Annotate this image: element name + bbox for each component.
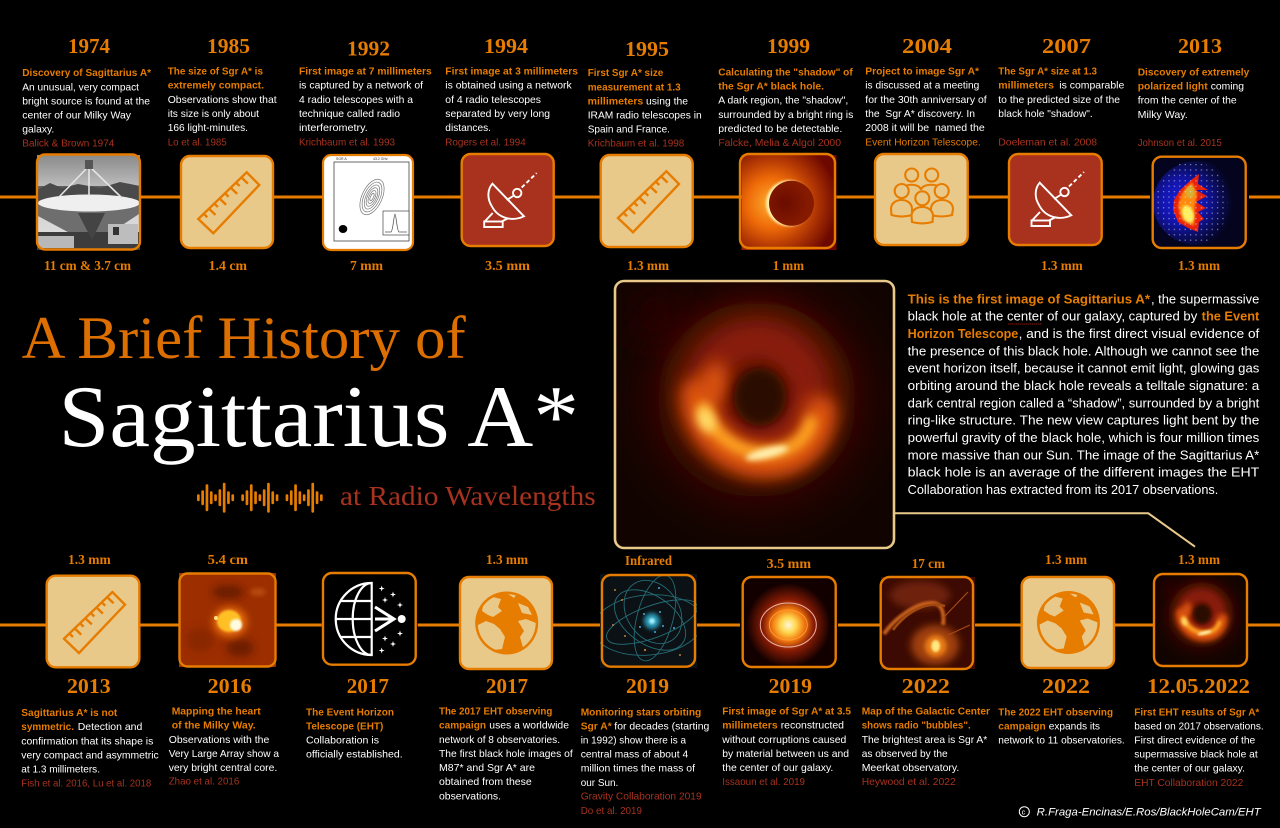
description: Milky Way. [1138, 109, 1188, 121]
year: 2019 [769, 674, 812, 698]
event 1974 [22, 34, 152, 273]
description: EHT Collaboration 2022 [1134, 777, 1243, 789]
description: the Sgr A* discovery. In [865, 108, 975, 120]
event 2022 Meerkat [862, 556, 990, 788]
description: is comparable [1059, 80, 1124, 92]
event 2004 [865, 34, 987, 245]
title: Sagittarius A* [58, 369, 579, 466]
description: Sagittarius A* is not [21, 707, 118, 719]
event 2007 [998, 34, 1124, 273]
image: Very Large Array core [179, 573, 276, 667]
year: 1995 [625, 37, 669, 61]
description: extremely compact. [168, 80, 264, 92]
description: First image at 7 millimeters [299, 66, 432, 78]
description: campaign [439, 720, 486, 732]
wavelength: 1.3 mm [1178, 258, 1221, 273]
description: based on 2017 observations. [1134, 720, 1264, 732]
event 1985 [168, 34, 277, 273]
description: center of our Milky Way [22, 110, 132, 122]
wavelength: 1.3 mm [68, 552, 111, 567]
description: 4 radio telescopes with a [299, 94, 413, 106]
description: Lo et al. 1985 [168, 136, 227, 148]
title [22, 305, 579, 466]
icon: people [875, 154, 968, 245]
description: uses a worldwide [489, 720, 569, 732]
description: from the center of the [1138, 95, 1237, 107]
description: the center of our galaxy. [722, 762, 833, 774]
wavelength: 3.5 mm [767, 556, 812, 571]
description [865, 66, 987, 148]
event 2022 campaign [998, 552, 1125, 747]
description: network of 8 observatories. [439, 734, 560, 746]
year: 2004 [902, 34, 952, 58]
description: bright source is found at the [22, 96, 150, 108]
description: campaign [998, 720, 1046, 732]
year: 12.05.2022 [1147, 674, 1250, 698]
description [721, 705, 851, 788]
description: Krichbaum et al. 1998 [588, 138, 684, 150]
description: Monitoring stars orbiting [581, 706, 701, 718]
description: network to 11 observatories. [998, 735, 1125, 747]
description: Spain and France. [588, 124, 670, 136]
subtitle with waveform icon: at Radio Wavelengths [340, 481, 596, 511]
description: Map of the Galactic Center [862, 705, 990, 717]
year: 2022 [902, 674, 950, 698]
main description text: black hole is an average of the different images the EHT [908, 466, 1260, 480]
description: without corruptions caused [721, 734, 846, 746]
main description text: , and is the first direct visual evidence of [1019, 327, 1260, 341]
description: Do et al. 2019 [581, 805, 642, 817]
description [306, 706, 403, 760]
description: reconstructed [781, 720, 844, 732]
description: symmetric. [21, 721, 74, 733]
description: of 4 radio telescopes [445, 94, 541, 106]
main description text: the presence of this black hole. Although we cannot see the [908, 344, 1259, 358]
icon: radio dish [462, 154, 554, 246]
description [998, 66, 1124, 148]
event 2013 top [1138, 34, 1249, 273]
year: 1994 [484, 34, 528, 58]
event 2017 collaboration [306, 573, 416, 760]
description: The brightest area is Sgr A* [862, 734, 987, 746]
event 2019 stars [581, 553, 709, 817]
description: black hole "shadow". [998, 108, 1093, 120]
main description text: the Event [1202, 310, 1260, 324]
description [168, 66, 277, 148]
main image: Sagittarius A* [614, 280, 896, 550]
description: Event Horizon Telescope. [865, 136, 981, 148]
main description text: more massive than our Sun. The image of the Sagittarius A* [908, 448, 1259, 462]
description: Sgr A* [581, 720, 613, 732]
wavelength: 1 mm [773, 258, 805, 273]
description: First direct evidence of the [1134, 735, 1255, 747]
description: by material between us and [722, 748, 849, 760]
description: is captured by a network of [299, 80, 423, 92]
event 1995 [588, 37, 702, 273]
icon: ruler [181, 156, 273, 248]
description: to the predicted size of the [998, 94, 1120, 106]
description: observations. [439, 790, 501, 802]
description: Meerkat observatory. [862, 762, 959, 774]
description: confirmation that its shape is [21, 735, 153, 747]
description: Mapping the heart [172, 705, 261, 717]
description: is discussed at a meeting [865, 80, 979, 92]
description: for the 30th anniversary of [865, 94, 987, 106]
description: Falcke, Melia & Algol 2000 [718, 137, 841, 149]
description [581, 706, 709, 817]
wavelength: 5.4 cm [208, 552, 249, 567]
description: very compact and asymmetric [21, 750, 159, 762]
description: First EHT results of Sgr A* [1134, 706, 1260, 718]
timeline line: top [0, 196, 1280, 198]
description: Collaboration is [306, 734, 379, 746]
description: coming [1211, 80, 1244, 92]
description [862, 705, 990, 788]
description: the center of our galaxy. [1134, 763, 1245, 775]
description: Telescope (EHT) [306, 720, 383, 732]
image: first EHT result [1149, 572, 1252, 668]
description: is obtained using a network [445, 80, 572, 92]
year: 2017 [486, 674, 528, 698]
description: very bright central core. [169, 762, 277, 774]
photo: radio telescope [37, 154, 140, 250]
description: Krichbaum et al. 1993 [299, 136, 395, 148]
image: radio bubbles [881, 577, 975, 669]
description: the Sgr A* black hole. [718, 80, 824, 92]
year: 2019 [626, 674, 669, 698]
description: our Sun. [581, 777, 618, 789]
event 1992 [299, 37, 432, 273]
description: An unusual, very compact [22, 81, 139, 93]
description: officially established. [306, 748, 403, 760]
icon: globe [1022, 577, 1114, 668]
description: First Sgr A* size [588, 67, 663, 79]
description: Observations show that [168, 94, 277, 106]
description [1134, 706, 1264, 789]
description: The Event Horizon [306, 706, 394, 718]
image: 7 mm contour map [323, 155, 413, 250]
description [445, 66, 578, 148]
description [439, 705, 573, 802]
description: Discovery of extremely [1138, 66, 1249, 78]
timeline line: bottom [0, 624, 1280, 626]
description [21, 707, 159, 790]
credit: R.Fraga-Encinas/E.Ros/BlackHoleCam/EHT [1037, 806, 1262, 818]
description: obtained from these [439, 776, 532, 788]
image: 7 mm contour map: 43.2 GHz [373, 157, 388, 161]
description: IRAM radio telescopes in [588, 110, 702, 122]
image: 7 mm contour map: SGR A [336, 157, 347, 161]
description [588, 67, 702, 150]
description: as observed by the [862, 748, 948, 760]
description [169, 705, 279, 788]
description: The first black hole images of [439, 748, 573, 760]
description: The 2017 EHT observing [439, 705, 552, 717]
main description text: Collaboration has extracted from its 2017 observations. [908, 483, 1218, 497]
event 2017 campaign [439, 552, 573, 802]
description: in 1992) show there is a [581, 735, 686, 747]
wavelength: 1.3 mm [627, 258, 670, 273]
description: 2008 it will be named the [865, 122, 985, 134]
main description text: This is the first image of Sagittarius A* [908, 293, 1150, 307]
icon: EHT globe [323, 573, 416, 665]
description: Johnson et al. 2015 [1138, 137, 1222, 149]
description: Calculating the "shadow" of [718, 66, 853, 78]
description: polarized light [1138, 80, 1208, 92]
description: Detection and [78, 721, 142, 733]
title: A Brief History of [22, 305, 466, 371]
year: 1985 [207, 34, 250, 58]
description: supermassive black hole at [1134, 749, 1258, 761]
description: for decades (starting [614, 720, 709, 732]
event 2013 bottom [21, 552, 159, 790]
wavelength: 1.3 mm [1045, 552, 1088, 567]
description: shows radio "bubbles". [862, 720, 971, 732]
description: Fish et al. 2016, Lu et al. 2018 [21, 778, 151, 790]
description: millimeters [588, 96, 643, 108]
description: using the [646, 96, 688, 108]
year: 1999 [767, 34, 810, 58]
image: 3.5 mm core [743, 577, 836, 667]
main description text: ring-like structure. The new view captures light bent by the [908, 414, 1259, 428]
wavelength: Infrared [625, 553, 672, 568]
event 1999 [718, 34, 853, 273]
main description text: dark central region called a “shadow”, surrounded by a bright [908, 396, 1260, 410]
description: Discovery of Sagittarius A* [22, 67, 152, 79]
description: technique called radio [299, 108, 400, 120]
description: First image at 3 millimeters [445, 66, 578, 78]
description: Issaoun et al. 2019 [722, 776, 805, 788]
description: distances. [445, 122, 491, 134]
year: 2017 [347, 674, 389, 698]
event 2016 [169, 552, 279, 788]
description: of the Milky Way. [172, 720, 256, 732]
description: Very Large Array show a [169, 748, 279, 760]
description: million times the mass of [581, 763, 695, 775]
main description text: black hole at the center of our galaxy, captured by [908, 310, 1198, 324]
icon: sound wave [197, 483, 323, 513]
description: Balick & Brown 1974 [22, 138, 114, 150]
year: 2022 [1042, 674, 1090, 698]
event 2019 3.5 mm [721, 556, 851, 788]
wavelength: 3.5 mm [485, 258, 531, 273]
event 12.05.2022 [1134, 552, 1264, 789]
icon: radio dish [1009, 154, 1102, 245]
description: surrounded by a bright ring is [718, 109, 853, 121]
description: Gravity Collaboration 2019 [581, 791, 702, 803]
description: 166 light-minutes. [168, 122, 248, 134]
description: Heywood et al. 2022 [862, 776, 956, 788]
description: The size of Sgr A* is [168, 66, 263, 78]
description: predicted to be detectable. [718, 123, 842, 135]
description: Zhao et al. 2016 [169, 776, 239, 788]
wavelength: 1.3 mm [1041, 258, 1083, 273]
description [718, 66, 853, 149]
description: First image of Sgr A* at 3.5 [722, 705, 851, 717]
description: millimeters [998, 80, 1054, 92]
credit: c [1022, 807, 1026, 816]
description: separated by very long [445, 108, 550, 120]
description: central mass of about 4 [581, 749, 688, 761]
wavelength: 17 cm [912, 556, 946, 571]
description: A dark region, the "shadow", [718, 95, 848, 107]
wavelength: 1.3 mm [486, 552, 529, 567]
main description text: orbiting around the black hole reveals a telltale signature: a [908, 379, 1259, 393]
subtitle with waveform icon [197, 481, 596, 513]
description: The Sgr A* size at 1.3 [998, 66, 1097, 78]
main description text [908, 293, 1260, 497]
main description text: , the supermassive [1151, 293, 1259, 307]
description [22, 67, 152, 150]
wavelength: 1.4 cm [209, 258, 248, 273]
icon: ruler [47, 576, 139, 667]
description: Observations with the [169, 734, 269, 746]
wavelength: 7 mm [350, 258, 384, 273]
year: 2016 [208, 674, 252, 698]
description: interferometry. [299, 122, 368, 134]
event 1994 [445, 34, 578, 273]
main description text: Horizon Telescope [908, 327, 1018, 341]
description: millimeters [722, 720, 778, 732]
description: expands its [1049, 720, 1100, 732]
description: Rogers et al. 1994 [445, 136, 526, 148]
image: polarized light map [1152, 156, 1246, 249]
description: galaxy. [22, 124, 54, 136]
image: predicted shadow [740, 154, 836, 250]
description [998, 706, 1125, 747]
description: at 1.3 millimeters. [21, 764, 100, 776]
description [299, 66, 432, 148]
icon: globe [460, 577, 552, 669]
year: 2013 [1178, 34, 1222, 58]
year: 1992 [347, 37, 390, 61]
connector from main image to 2022 result [894, 513, 1195, 547]
main description text: event horizon itself, because it cannot emit light, glowing gas [908, 362, 1259, 376]
main description text: powerful gravity of the black hole, which is four million times [908, 431, 1259, 445]
image: stellar orbits [600, 574, 697, 668]
wavelength: 1.3 mm [1178, 552, 1221, 567]
icon: ruler [601, 155, 693, 247]
year: 2007 [1042, 34, 1091, 58]
year: 2013 [67, 674, 111, 698]
description: measurement at 1.3 [588, 81, 681, 93]
wavelength: 11 cm & 3.7 cm [44, 258, 132, 273]
description: The 2022 EHT observing [998, 706, 1113, 718]
description: M87* and Sgr A* are [439, 762, 535, 774]
description [1138, 66, 1249, 149]
description: Project to image Sgr A* [865, 66, 980, 78]
description: its size is only about [168, 108, 259, 120]
description: Doeleman et al. 2008 [998, 136, 1097, 148]
year: 1974 [68, 34, 110, 58]
